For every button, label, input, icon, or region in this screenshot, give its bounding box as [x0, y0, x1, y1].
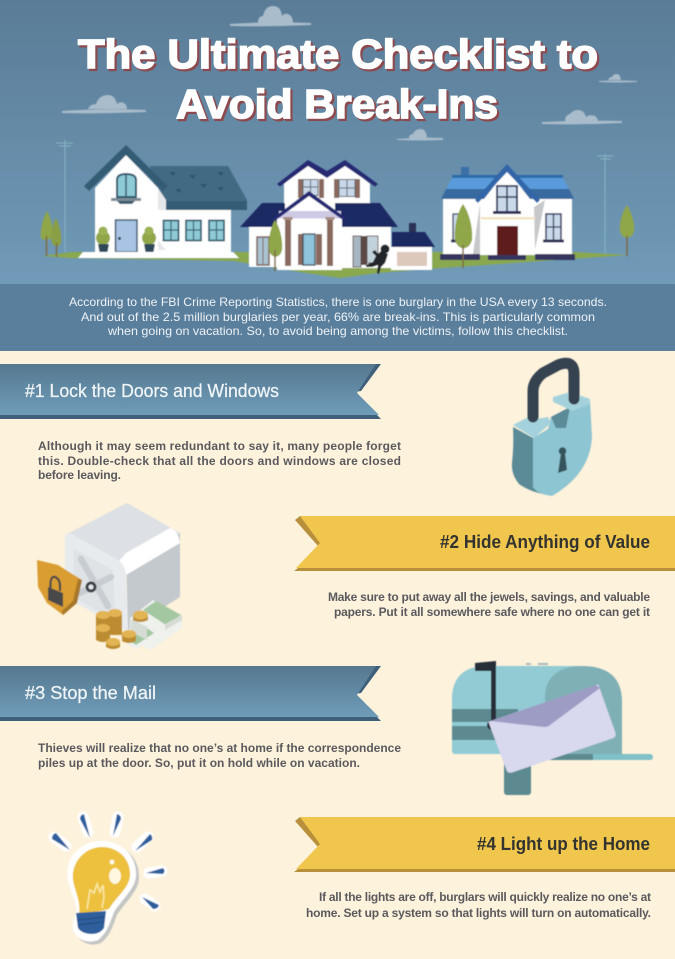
trees, left [41, 211, 61, 257]
icon: light bulb [52, 814, 164, 945]
body 1: Although it may seem redundant to say it, many people forget [38, 439, 401, 453]
icon: padlock [512, 363, 592, 496]
section 1: lock the doors [0, 363, 592, 496]
tree: house 3 [455, 204, 472, 268]
body 2 [328, 590, 650, 619]
body 2: papers. Put it all somewhere safe where no one can get it [334, 605, 650, 619]
title: The Ultimate Checklist to [80, 33, 600, 79]
title: Avoid Break-Ins [178, 83, 500, 129]
icon: safe with shield, coins and cash [37, 503, 182, 650]
body 4 [306, 890, 651, 920]
utility poles [56, 140, 614, 255]
body 2: Make sure to put away all the jewels, savings, and valuable [328, 590, 650, 604]
body 3: piles up at the door. So, put it on hold while on vacation. [38, 756, 360, 770]
body 1: this. Double-check that all the doors and windows are closed [38, 454, 401, 468]
title: The Ultimate Checklist to [78, 31, 598, 77]
section 4: light up the home [52, 814, 675, 945]
clouds [62, 6, 637, 140]
lawn [42, 250, 628, 278]
house 1 [78, 145, 247, 258]
neighbourhood illustration [41, 140, 634, 278]
ribbon 2 [294, 516, 675, 571]
section 2: hide anything of value [37, 503, 675, 650]
ribbon 4 [294, 817, 675, 872]
title: Avoid Break-Ins [176, 81, 498, 127]
burglar [366, 244, 390, 274]
intro panel [0, 284, 675, 351]
house 3 [440, 164, 575, 260]
header panel: sky [0, 0, 675, 285]
title [78, 31, 600, 129]
section 3: stop the mail [0, 661, 653, 795]
ribbon 1 [0, 364, 381, 419]
icon: mailbox with envelope [452, 661, 653, 795]
intro text [69, 295, 607, 338]
tree: house 2 [269, 220, 282, 271]
body 3 [38, 741, 401, 770]
garage [391, 223, 435, 270]
intro text: And out of the 2.5 million burglaries per year, 66% are break-ins. This is particularly common [81, 310, 595, 324]
body 4: home. Set up a system so that lights will turn on automatically. [306, 906, 651, 920]
heading 1: #1 Lock the Doors and Windows [25, 381, 279, 401]
heading 2: #2 Hide Anything of Value [440, 532, 650, 552]
body 3: Thieves will realize that no one’s at home if the correspondence [38, 741, 401, 755]
intro text: when going on vacation. So, to avoid being among the victims, follow this checklist. [107, 324, 568, 338]
body 1: before leaving. [38, 468, 121, 482]
ribbon 3 [0, 666, 381, 721]
tree: right [620, 205, 634, 256]
body 4: If all the lights are off, burglars will quickly realize no one’s at [319, 890, 651, 904]
body 1 [38, 439, 401, 482]
intro text: According to the FBI Crime Reporting Statistics, there is one burglary in the USA every 13 seconds. [69, 295, 607, 309]
heading 4: #4 Light up the Home [477, 834, 650, 854]
house 2 [240, 160, 398, 270]
heading 3: #3 Stop the Mail [25, 683, 156, 703]
